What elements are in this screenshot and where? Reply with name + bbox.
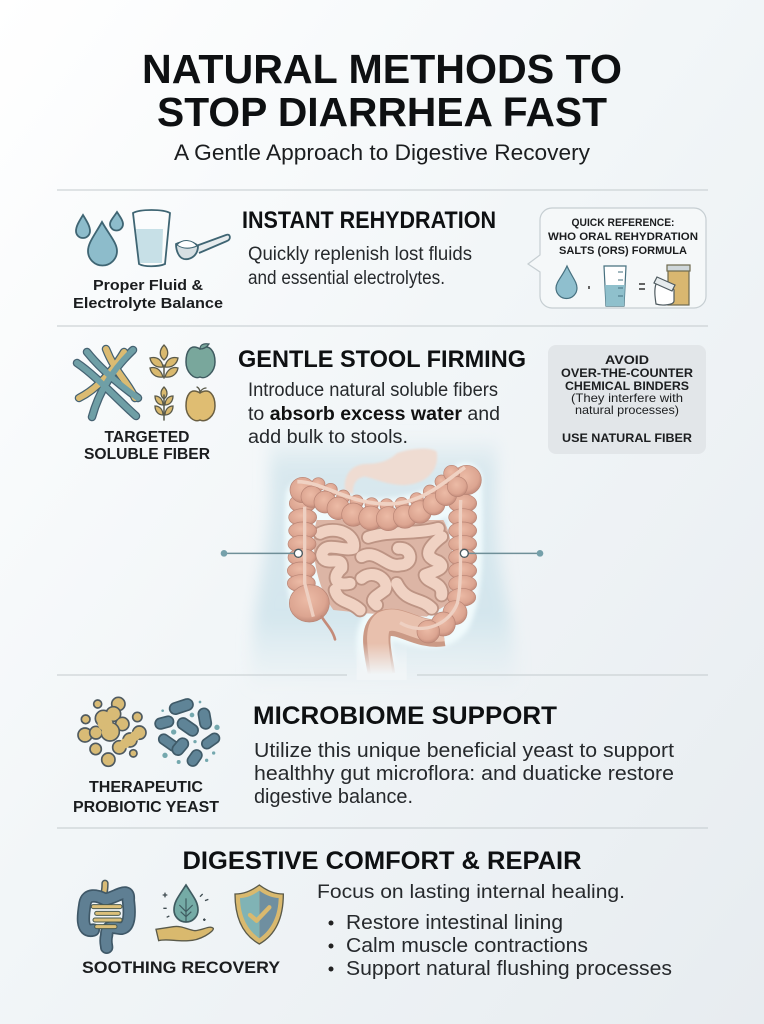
callout: ORS quick reference <box>528 208 706 308</box>
icon: water drops, glass and scoop <box>76 210 230 266</box>
icon label: therapeutic probiotic yeast: THERAPEUTIC <box>89 779 203 796</box>
small intestine <box>314 520 453 617</box>
list: recovery points: Restore intestinal lining <box>346 912 563 934</box>
callout: avoid chemical binders: natural processes) <box>575 403 679 417</box>
list: recovery points <box>328 912 672 980</box>
connector: right <box>460 549 543 557</box>
text: microbiome description: Utilize this unique beneficial yeast to support <box>254 740 674 762</box>
transverse colon <box>290 465 481 531</box>
title: STOP DIARRHEA FAST <box>157 89 607 135</box>
icon label: targeted soluble fiber <box>84 429 210 463</box>
torso silhouette <box>251 440 515 687</box>
callout: avoid chemical binders: CHEMICAL BINDERS <box>565 379 689 393</box>
panel: gentle stool firming <box>77 344 706 463</box>
callout: avoid chemical binders: OVER-THE-COUNTER <box>561 366 693 380</box>
text: fiber description: add bulk to stools. <box>248 427 408 448</box>
text: microbiome description: digestive balance. <box>254 786 413 808</box>
callout: avoid chemical binders: (They interfere with <box>571 391 683 405</box>
heading: digestive comfort and repair: DIGESTIVE COMFORT & REPAIR <box>182 847 582 875</box>
icon label: targeted soluble fiber: SOLUBLE FIBER <box>84 446 210 463</box>
text: microbiome description: healthhy gut microflora: and duaticke restore <box>254 763 674 785</box>
text: fiber description: Introduce natural soluble fibers <box>248 380 498 401</box>
icon label: therapeutic probiotic yeast <box>73 779 220 816</box>
list: recovery points: Support natural flushing processes <box>346 958 672 980</box>
text: healing intro: Focus on lasting internal healing. <box>317 881 625 903</box>
heading: microbiome support: MICROBIOME SUPPORT <box>253 702 557 730</box>
icon: ORS formula <box>556 265 690 306</box>
callout: avoid chemical binders: AVOID <box>605 353 649 367</box>
stomach <box>345 449 437 495</box>
heading: gentle stool firming: GENTLE STOOL FIRMING <box>238 346 526 373</box>
icon label: proper fluid: Electrolyte Balance <box>73 295 223 312</box>
callout: ORS quick reference: SALTS (ORS) FORMULA <box>559 245 687 257</box>
panel: instant rehydration <box>73 207 706 312</box>
title: NATURAL METHODS TO <box>142 46 622 92</box>
sigmoid fade <box>357 643 407 680</box>
icon: fibers, grain and apples <box>77 344 215 421</box>
callout: ORS quick reference: WHO ORAL REHYDRATION <box>548 231 698 243</box>
text: microbiome description <box>254 740 674 808</box>
text: fiber description <box>248 380 500 448</box>
sigmoid colon <box>377 620 443 675</box>
ascending colon <box>287 494 329 622</box>
heading: instant rehydration: INSTANT REHYDRATION <box>242 207 496 234</box>
icon label: soothing recovery: SOOTHING RECOVERY <box>82 958 281 977</box>
text: rehydration description: and essential electrolytes. <box>248 268 445 289</box>
subtitle: A Gentle Approach to Digestive Recovery <box>174 140 590 165</box>
callout: ORS quick reference: QUICK REFERENCE: <box>572 217 674 229</box>
icon: gut, hand with leaf drop, shield <box>83 883 283 947</box>
title <box>142 46 622 135</box>
connector: left <box>221 549 302 557</box>
halo <box>302 480 465 670</box>
text: rehydration description <box>248 244 472 289</box>
list: recovery points: Calm muscle contractions <box>346 935 588 957</box>
panel: microbiome support <box>73 697 674 816</box>
icon: yeast and bacteria <box>78 697 221 768</box>
icon label: therapeutic probiotic yeast: PROBIOTIC YEAST <box>73 799 220 816</box>
illustration: torso and intestines <box>221 440 543 687</box>
callout: avoid chemical binders: USE NATURAL FIBER <box>562 431 692 445</box>
appendix <box>322 617 335 639</box>
text: fiber description: to absorb excess water and <box>248 404 500 425</box>
icon label: proper fluid <box>73 277 223 312</box>
icon label: targeted soluble fiber: TARGETED <box>104 429 190 446</box>
panel: digestive comfort and repair <box>82 847 672 980</box>
callout: avoid chemical binders <box>548 345 706 454</box>
text: rehydration description: Quickly replenish lost fluids <box>248 244 472 265</box>
icon label: proper fluid: Proper Fluid & <box>93 277 203 294</box>
descending colon <box>417 494 477 643</box>
